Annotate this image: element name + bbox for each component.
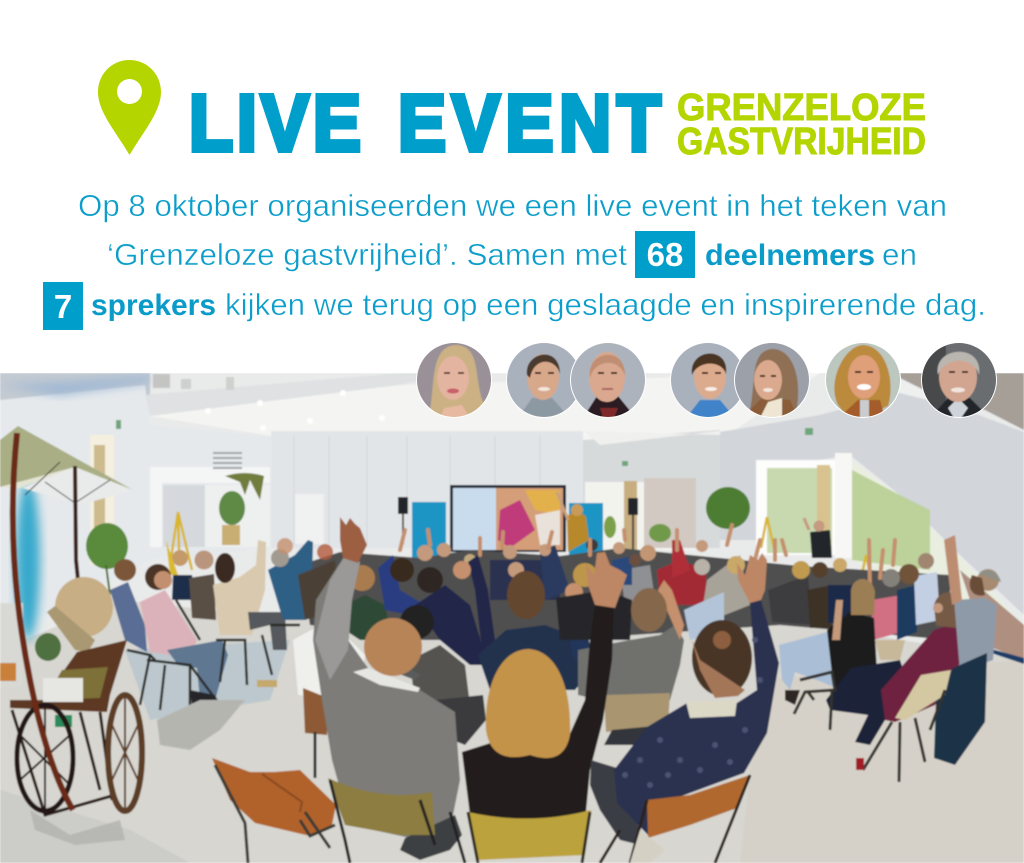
- title: EVENT: [398, 79, 661, 168]
- portrait 6: [825, 342, 901, 418]
- back row audience: [300, 525, 950, 640]
- number badge: 7 speakers: [43, 282, 83, 330]
- speaker portraits: [416, 342, 997, 422]
- beige chair: [863, 670, 951, 782]
- event photo: [0, 373, 1024, 863]
- number badge: 68 participants: 68: [647, 236, 683, 273]
- portrait 3: [570, 342, 646, 418]
- small chair: [794, 672, 835, 730]
- room background: [0, 373, 1024, 863]
- intro text: kijken we terug op een geslaagde en inspirerende dag.: [225, 287, 986, 322]
- right row audience: [779, 535, 1001, 782]
- left wall blue glow: [0, 376, 150, 640]
- floor shadow: [157, 700, 245, 750]
- yellow chair: [468, 810, 591, 863]
- portrait 4: [670, 342, 746, 418]
- subtitle: GRENZELOZE: [677, 87, 926, 129]
- number badge: 7 speakers: 7: [54, 288, 72, 325]
- intro text: Op 8 oktober organiseerden we een live event in het teken van: [78, 188, 947, 223]
- title: LIVE: [189, 79, 361, 168]
- floor: [0, 600, 1024, 863]
- intro text: [43, 188, 986, 330]
- cart legs and wheels: [12, 710, 115, 815]
- title: [189, 79, 661, 168]
- portrait 2: [506, 342, 582, 418]
- number badge: 68 participants: [635, 231, 695, 278]
- windows: [90, 435, 1024, 664]
- ceiling lights: [116, 374, 813, 466]
- portrait 1: [416, 342, 492, 422]
- portrait 7: [921, 342, 997, 418]
- subtitle: [677, 87, 926, 163]
- tripods: [169, 511, 869, 571]
- vintage cart: [0, 426, 142, 845]
- middle row audience: [293, 555, 684, 778]
- woman with blonde hair: [462, 552, 627, 825]
- man in grey sweater: [313, 517, 462, 860]
- portrait 5: [734, 342, 810, 418]
- right stair wall: [720, 393, 1024, 615]
- left row audience: [110, 538, 340, 725]
- round wooden disc: [55, 577, 113, 637]
- intro text: ‘Grenzeloze gastvrijheid’. Samen met: [107, 237, 627, 272]
- canopy: [0, 426, 133, 505]
- orange front chair: [600, 775, 750, 863]
- subtitle: GASTVRIJHEID: [677, 121, 926, 163]
- icon: location pin: [98, 60, 161, 155]
- intro text: sprekers: [91, 289, 216, 322]
- presenter: [557, 492, 589, 552]
- gold chair: [328, 778, 465, 863]
- intro text: deelnemers: [705, 239, 875, 272]
- standing guest: [804, 518, 832, 558]
- cart window with candles: [0, 603, 23, 687]
- intro text: en: [882, 237, 917, 272]
- table: [10, 640, 127, 712]
- man in patterned shirt: [590, 553, 779, 850]
- stage screen and banners: [398, 485, 832, 568]
- orange chair: [212, 758, 336, 863]
- plants: [86, 473, 750, 595]
